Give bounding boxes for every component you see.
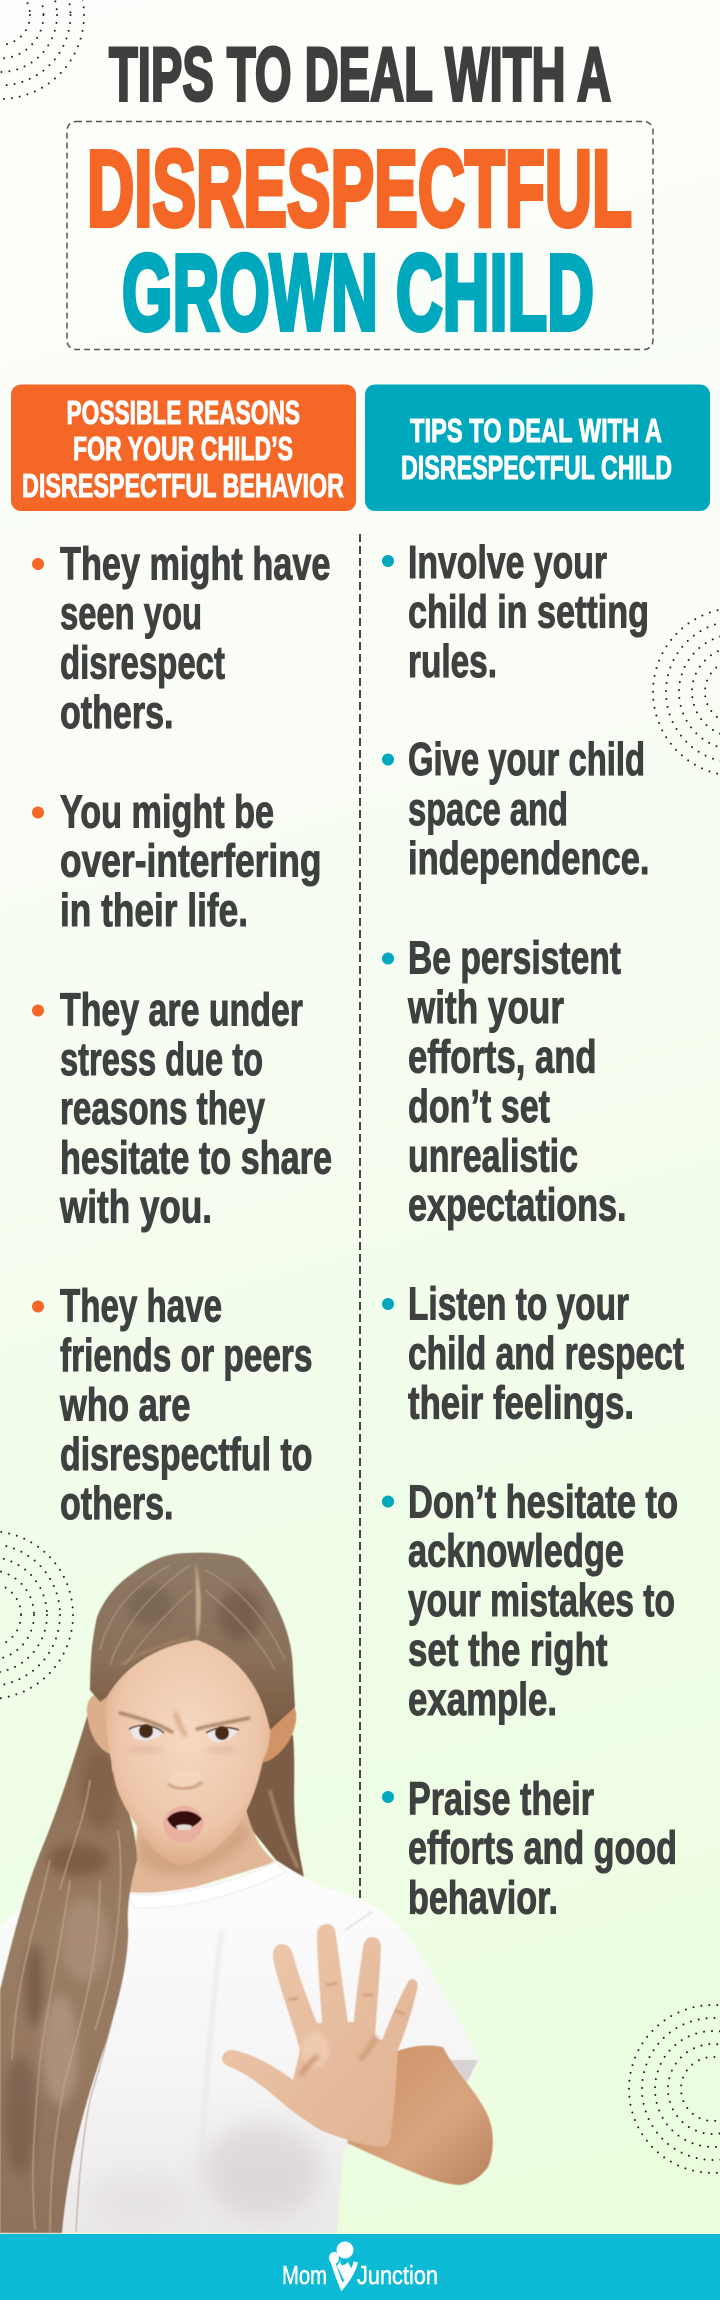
reason 1: others. [60,686,174,738]
tip 6: behavior. [408,1872,558,1924]
ears [87,1692,296,1763]
panel heading: possible reasons: FOR YOUR CHILD’S [73,430,293,467]
reason 2: in their life. [60,884,248,936]
mouth [163,1806,204,1843]
tip 3 [382,932,626,1230]
footer bar [0,2234,720,2300]
tip 6: Praise their [408,1772,594,1824]
reason 2: You might be [60,786,274,838]
reason 3: stress due to [60,1033,263,1085]
tip 1: Involve your [408,536,607,588]
tip 1 [382,536,649,687]
reason 4 [32,1280,312,1529]
reason 3: reasons they [60,1082,265,1134]
face [106,1640,270,1865]
panel heading: possible reasons: DISRESPECTFUL BEHAVIOR [22,467,344,504]
logo: MomJunction [282,2242,438,2290]
dotted circle decoration: right upper [653,608,720,776]
logo: MomJunction: Mom [282,2260,327,2290]
hair crown [90,1553,295,1730]
title box: dashed frame with highlighted words [67,122,653,352]
panel heading: possible reasons: POSSIBLE REASONS [66,394,300,431]
column divider [359,534,361,1898]
dotted circle decoration: top left [0,0,84,99]
raised hand [222,1924,418,2147]
tip 5: set the right [408,1624,608,1676]
tip 3: unrealistic [408,1130,578,1182]
tip 1: rules. [408,635,497,687]
hair behind right shoulder [240,1735,304,1878]
reason 1: disrespect [60,636,225,688]
tip 3: efforts, and [408,1030,596,1082]
reason 3: hesitate to share [60,1132,332,1184]
tip 3: with your [407,981,564,1033]
tip 3: expectations. [408,1178,626,1230]
reason 1: seen you [60,587,202,639]
shirt shading [202,2122,322,2218]
reason 4: They have [60,1280,222,1332]
reason 4: others. [60,1477,174,1529]
reason 3: with you. [59,1180,212,1232]
nose [169,1770,201,1789]
tip 5: acknowledge [408,1524,624,1576]
tip 4: their feelings. [408,1376,634,1428]
tip 2: space and [408,783,568,835]
reason 3: They are under [60,984,303,1036]
tip 6 [382,1772,677,1924]
tip 5: example. [408,1673,557,1725]
eyes [130,1726,163,1740]
list: tips [382,536,684,1924]
reason 2 [32,786,322,936]
tip 3: don’t set [408,1080,550,1132]
list: possible reasons [32,538,332,1529]
panel heading: possible reasons [11,384,356,511]
reason 1 [32,538,330,738]
reason 4: friends or peers [60,1329,312,1381]
reason 1: They might have [60,538,330,590]
dotted circle decoration: right lower [629,2005,720,2173]
tip 2 [382,733,650,884]
forearm [347,2045,493,2185]
logo: MomJunction: Junction [357,2260,438,2290]
reason 3 [32,984,332,1232]
dotted circle decoration: left middle [0,1531,73,1699]
eyebrows [120,1713,249,1732]
reason 4: who are [59,1378,190,1430]
reason 4: disrespectful to [60,1428,312,1480]
panel heading: tips to deal [365,384,710,511]
tip 4 [382,1278,684,1428]
long hair on the left [0,1700,137,2233]
tip 5 [382,1476,678,1725]
white t-shirt [0,1861,480,2233]
reason 2: over-interfering [60,834,322,886]
neck [122,1805,276,1898]
tip 3: Be persistent [408,932,621,984]
illustration: angry girl with raised hand [0,1553,493,2233]
tip 4: Listen to your [408,1278,629,1330]
facial features [120,1712,249,1843]
